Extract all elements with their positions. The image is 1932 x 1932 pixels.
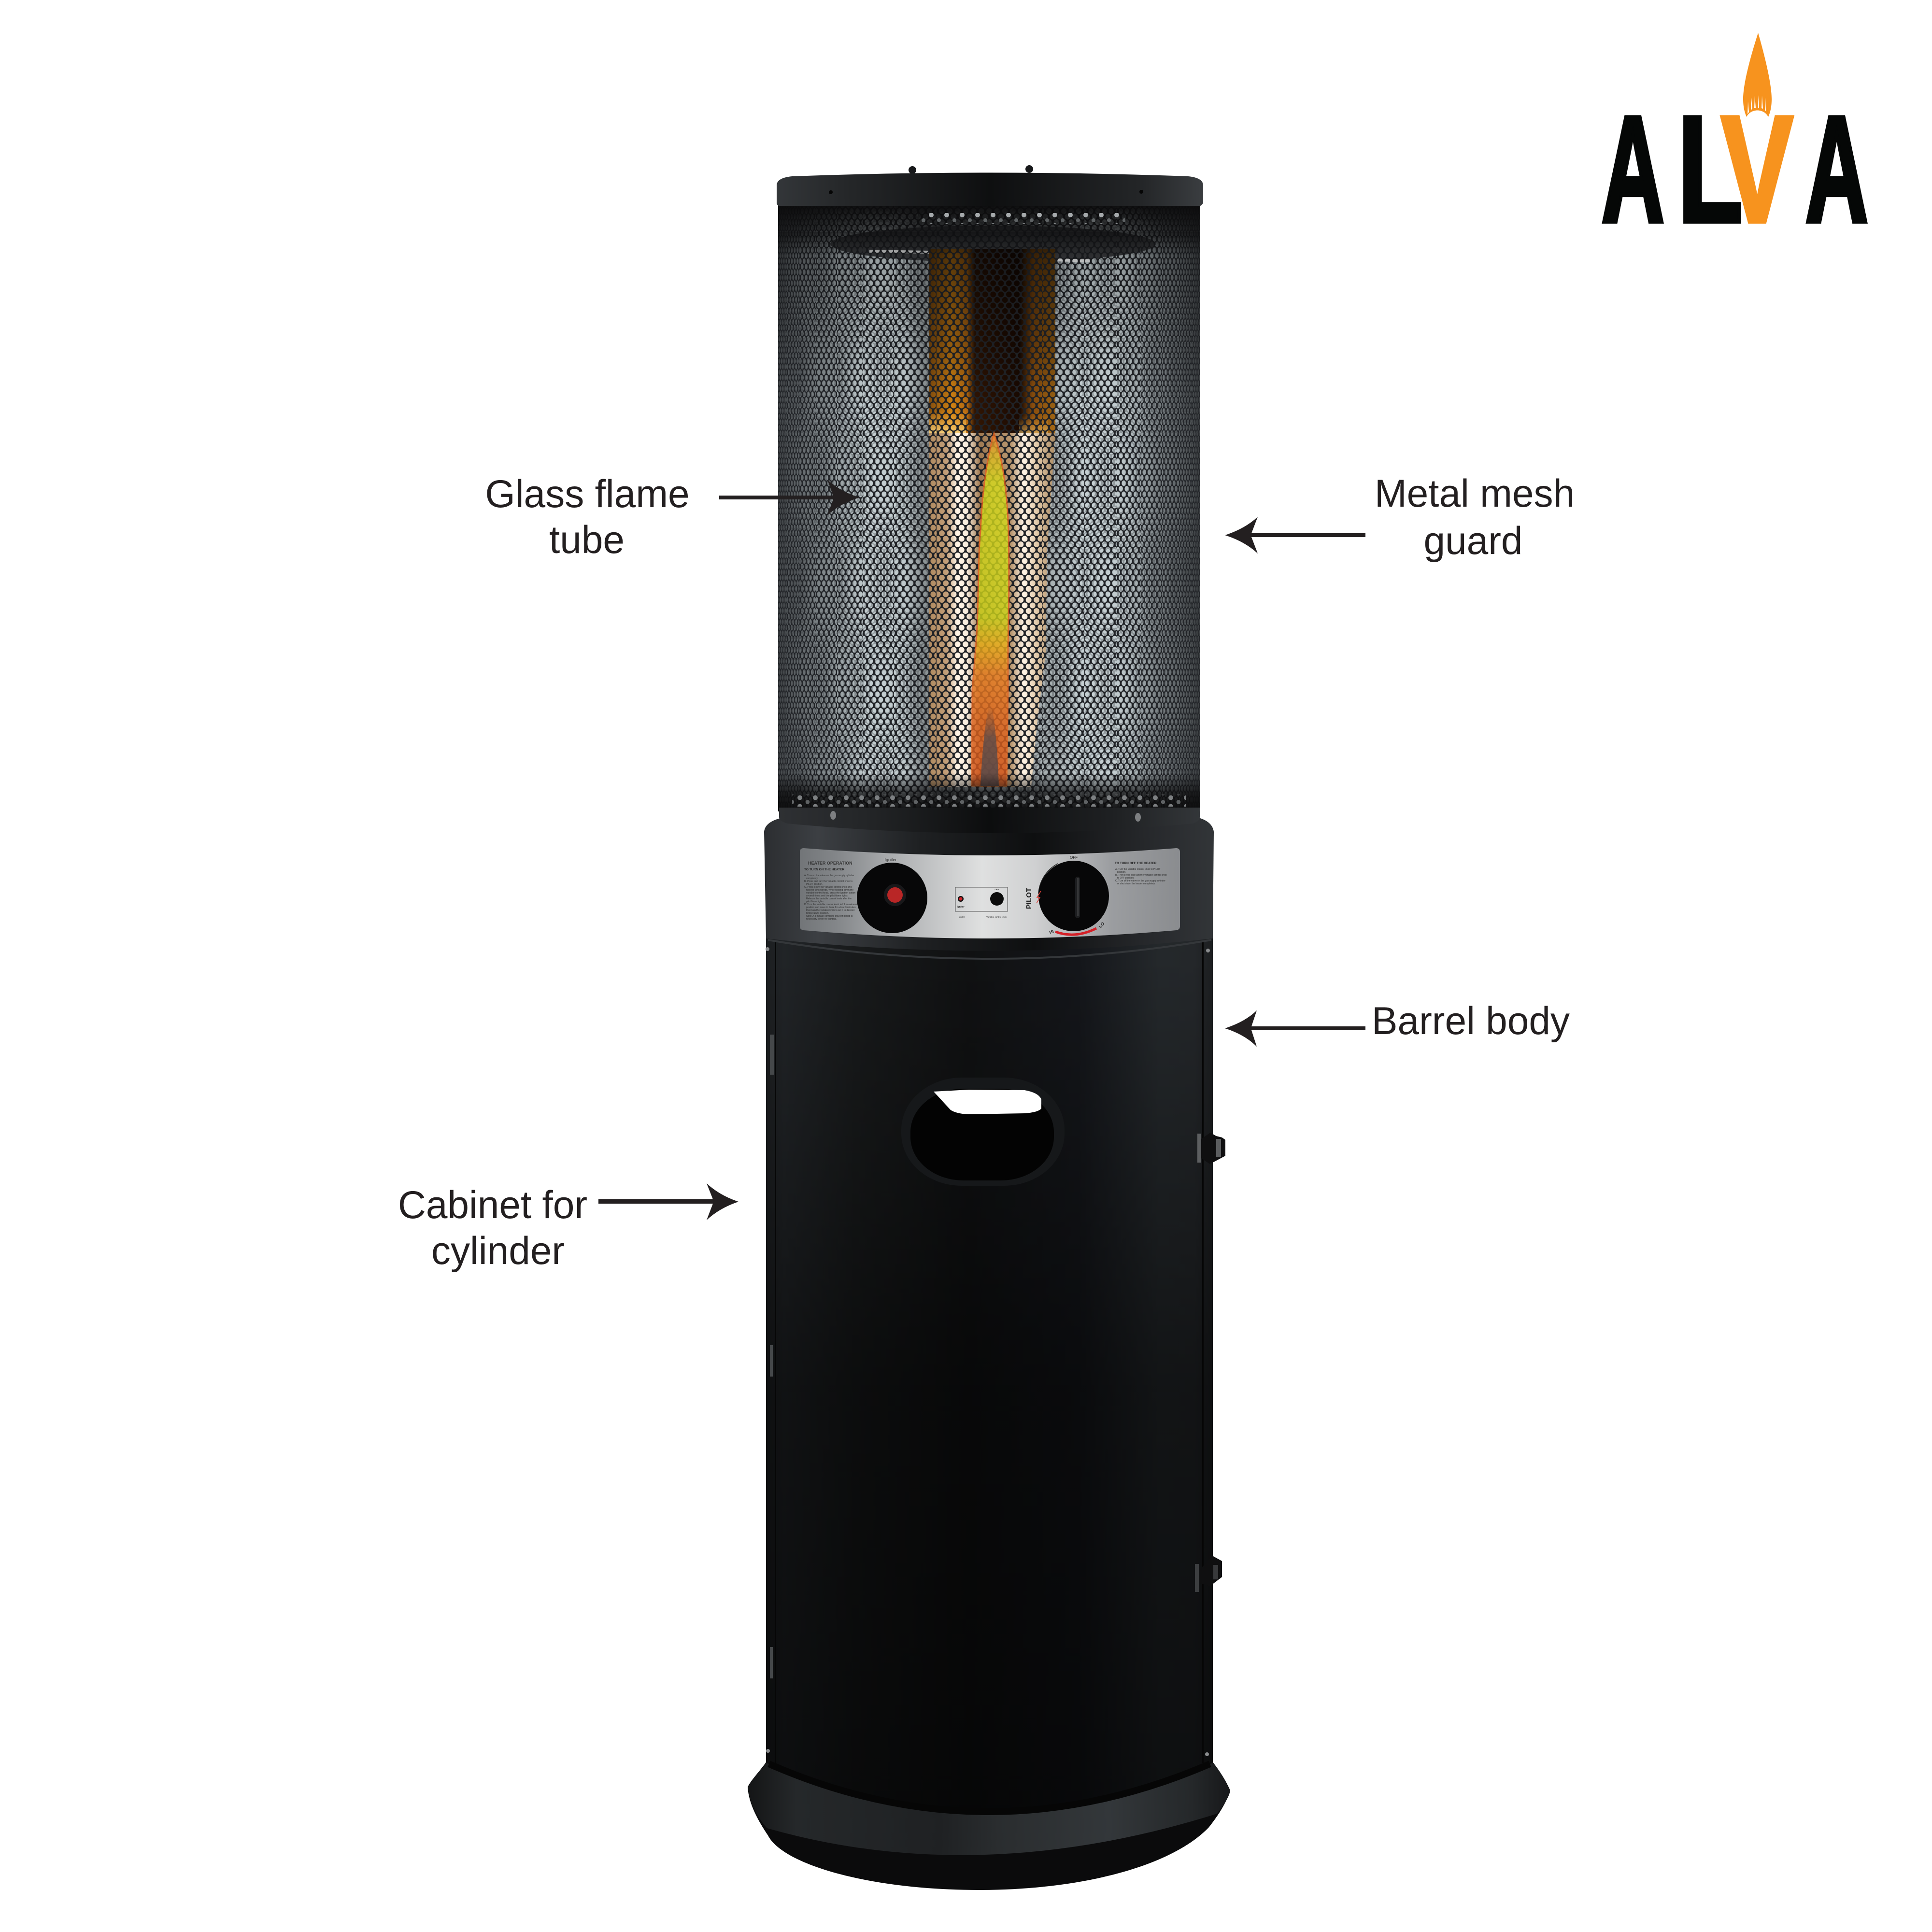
label: metal mesh guard: guard	[1423, 519, 1523, 563]
mesh bottom shading	[778, 773, 1200, 811]
operating instructions right: position.	[1117, 871, 1126, 874]
label: glass flame tube	[485, 472, 690, 562]
operating instructions right: to OFF position.	[1117, 877, 1135, 880]
operating instructions right: or shut down the heater completely.	[1117, 882, 1155, 885]
operating instructions left	[804, 861, 858, 921]
gas control knob: HI	[1049, 929, 1054, 935]
label: cabinet for cylinder	[398, 1183, 587, 1273]
operating instructions left: HEATER OPERATION	[808, 861, 852, 866]
glass flame tube	[929, 433, 1055, 787]
flared base	[748, 1762, 1230, 1890]
operating instructions left: Note: A 3 minute complete shut off period is	[806, 915, 853, 918]
operating instructions left: then turn the variable knob to set it to desired	[806, 909, 854, 912]
diagram box: Variable control knob	[986, 916, 1007, 918]
label: glass flame tube: Glass flame	[485, 472, 690, 516]
operating instructions right: A. Turn the variable control knob to PILOT	[1115, 868, 1160, 871]
cap pegs	[909, 165, 1033, 174]
base outline	[748, 1762, 1230, 1890]
label: metal mesh guard: Metal mesh	[1375, 472, 1575, 515]
mesh top perforation row	[918, 213, 1125, 224]
logo: ALVA	[1602, 33, 1868, 254]
logo wordmark letters	[1602, 85, 1868, 254]
arrow: to glass flame tube	[719, 480, 860, 515]
operating instructions left: hold for 30 seconds. While holding down the	[806, 889, 853, 892]
operating instructions right: TO TURN OFF THE HEATER	[1115, 862, 1157, 865]
logo wordmark letters: A	[1805, 85, 1868, 253]
shoulder band	[764, 817, 1214, 951]
diagram box: Igniter	[959, 916, 965, 918]
operating instructions left: B. Press and turn the variable control knob to	[804, 880, 852, 883]
gas control knob: OFF	[1070, 855, 1078, 860]
gas control knob	[1025, 855, 1109, 935]
operating instructions left: completely.	[806, 877, 818, 880]
collar under mesh	[779, 808, 1200, 833]
cabinet body	[766, 932, 1213, 1814]
arrow: to metal mesh guard	[1225, 517, 1365, 554]
gas control knob: PILOT	[1025, 888, 1033, 909]
operating instructions left: C. Press down the variable control knob and	[804, 886, 852, 889]
logo wordmark letters: V	[1721, 85, 1793, 254]
diagram box: Igniter	[957, 906, 965, 909]
igniter button: Igniter	[884, 857, 897, 862]
upper latch	[1197, 1133, 1225, 1164]
operating instructions left: several times until the pilot flame lights.	[806, 895, 848, 897]
operating instructions right: C. Turn off the valve on the gas supply cylinder	[1115, 880, 1165, 882]
operating instructions left: A. Turn on the valve on the gas supply cylinder	[804, 874, 854, 877]
logo wordmark letters: A	[1602, 85, 1664, 253]
operating instructions right: B. Then press and turn the variable control knob	[1115, 874, 1167, 877]
label: glass flame tube: tube	[549, 518, 625, 562]
steel plate	[800, 848, 1180, 938]
mesh upper darkening	[778, 232, 1200, 396]
flame	[972, 433, 1009, 786]
body bolts	[766, 947, 1210, 1756]
control panel	[800, 848, 1180, 938]
operating instructions left: Release the variable control knob after the	[806, 897, 852, 900]
carry handle cutout	[901, 1078, 1065, 1186]
mesh guard cylinder	[778, 205, 1200, 811]
upper burner tube	[929, 249, 1055, 433]
diagram box	[955, 887, 1008, 918]
gas control knob: LO	[1098, 921, 1106, 929]
shoulder ridge highlight	[768, 940, 1211, 959]
body darkening	[766, 956, 1213, 1814]
logo flame	[1743, 33, 1772, 117]
lower body barrel	[748, 808, 1230, 1890]
label: metal mesh guard	[1375, 472, 1575, 563]
operating instructions left: position and leave in there for about 3 minutes,	[806, 906, 856, 909]
operating instructions left: TO TURN ON THE HEATER	[804, 868, 844, 871]
lower latch	[1195, 1556, 1222, 1592]
left hinges	[770, 1035, 774, 1678]
arrow: to cabinet	[598, 1183, 739, 1220]
reflector disc	[830, 226, 1156, 262]
door latches and hinges	[766, 947, 1225, 1756]
operating instructions left: pilot flame lights.	[806, 900, 824, 903]
mesh bottom perforation row	[792, 795, 1186, 807]
operating instructions left: PILOT position.	[806, 883, 823, 886]
operating instructions left: temperature position.	[806, 912, 829, 915]
moire shading	[778, 205, 1200, 811]
label: cabinet for cylinder: cylinder	[431, 1229, 565, 1273]
label: barrel body: Barrel body	[1372, 999, 1570, 1043]
base ridge	[769, 1764, 1210, 1812]
patio heater	[748, 165, 1230, 1890]
top cap	[777, 165, 1203, 206]
collar screws	[830, 811, 1141, 822]
label: cabinet for cylinder: Cabinet for	[398, 1183, 587, 1227]
operating instructions left: necessary before re-lighting.	[806, 918, 837, 921]
igniter button	[857, 857, 927, 933]
diagram box: OFF	[995, 888, 999, 891]
arrow: to barrel body	[1225, 1010, 1365, 1047]
front wall of mesh	[778, 205, 1200, 811]
logo wordmark letters: L	[1678, 85, 1742, 254]
base lighter band	[748, 1763, 1230, 1855]
mesh top shading	[778, 205, 1200, 256]
operating instructions right	[1115, 862, 1167, 885]
cap rivets	[829, 190, 1143, 194]
operating instructions left: D. Turn the variable control knob to HI (maximum)	[804, 903, 858, 906]
operating instructions left: variable control knob, press the Ignition button	[806, 892, 856, 895]
view through mesh	[778, 205, 1200, 811]
door seams	[775, 942, 1204, 1763]
back wall of mesh	[778, 205, 1200, 811]
cap ring	[777, 173, 1203, 206]
